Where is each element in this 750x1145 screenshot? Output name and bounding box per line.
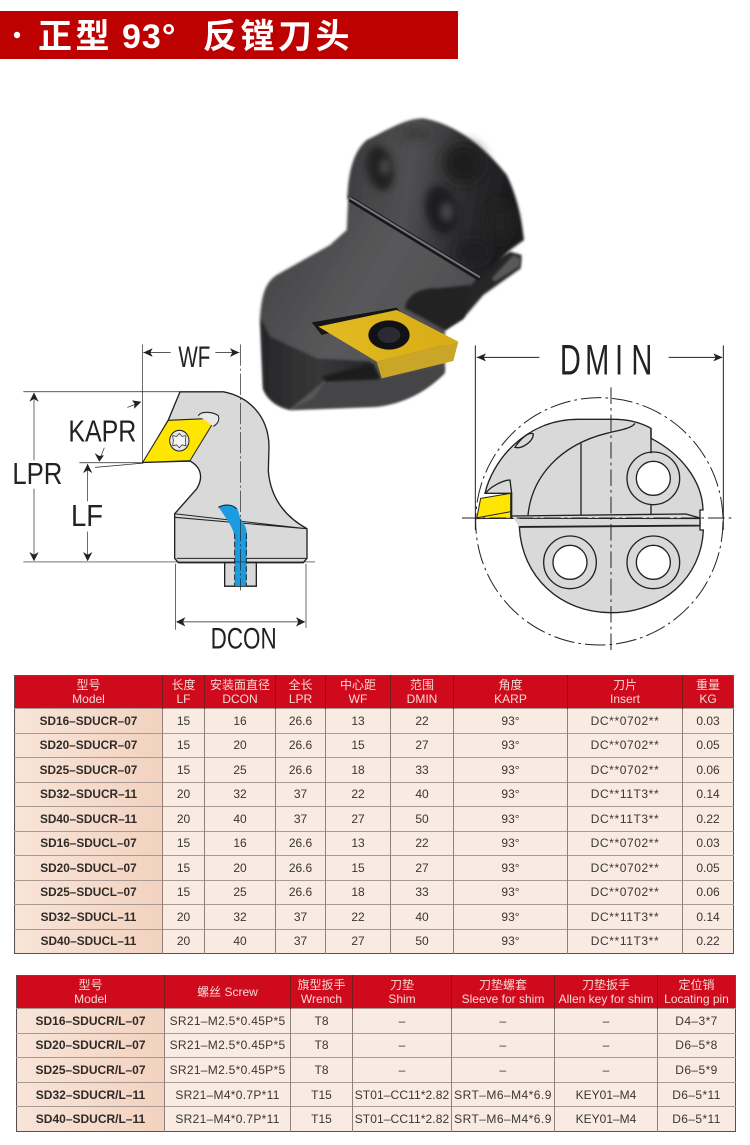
accessories table: T8: [314, 1063, 328, 1077]
parameter table: 0.14: [696, 910, 720, 924]
accessories table: –: [399, 1038, 405, 1052]
title banner: 反镗刀头: [203, 18, 353, 56]
accessories table: D6–5*8: [675, 1038, 718, 1052]
parameter table: 93°: [501, 836, 520, 850]
parameter table: SD25–SDUCR–07: [40, 763, 137, 777]
dimension lines: [23, 344, 315, 630]
parameter table: DC**0702**: [591, 738, 659, 752]
parameter table: 37: [294, 812, 307, 826]
parameter table: 22: [415, 836, 429, 850]
parameter table: 角度: [498, 678, 522, 692]
end view: lower right screw hole: [627, 536, 680, 589]
parameter table: 93°: [501, 861, 520, 875]
end view: dashed DMIN circle: [476, 398, 723, 645]
parameter table: 0.22: [696, 812, 720, 826]
parameter table: 20: [233, 861, 247, 875]
accessories table: –: [499, 1038, 507, 1052]
parameter table: Model: [72, 692, 105, 706]
parameter table: 40: [233, 934, 247, 948]
accessories table: 刀垫: [390, 978, 414, 992]
parameter table: 15: [351, 738, 365, 752]
accessories table: SD20–SDUCR/L–07: [35, 1038, 146, 1052]
parameter table: DC**11T3**: [591, 787, 659, 801]
parameter table: 0.03: [696, 714, 720, 728]
accessories table: SRT–M6–M4*6.9: [454, 1112, 552, 1126]
parameter table: DCON: [222, 692, 258, 706]
parameter table: SD25–SDUCL–07: [40, 885, 137, 899]
accessories table: –: [399, 1014, 405, 1028]
accessories table: KEY01–M4: [576, 1112, 636, 1126]
parameter table: DC**11T3**: [591, 910, 659, 924]
parameter table: SD20–SDUCL–07: [40, 861, 137, 875]
accessories table: T15: [311, 1088, 332, 1102]
parameter table: DMIN: [407, 692, 437, 706]
parameter table: 安装面直径: [210, 678, 270, 692]
parameter table: SD16–SDUCL–07: [40, 836, 137, 850]
parameter table: [14, 675, 734, 954]
parameter table: 0.14: [696, 787, 720, 801]
parameter table: 93°: [501, 763, 520, 777]
right technical drawing: end view: [462, 336, 732, 650]
accessories table: SD32–SDUCR/L–11: [36, 1088, 145, 1102]
side view: spigot: [225, 563, 256, 586]
label: KAPR: KAPR: [68, 414, 136, 449]
accessories table: 螺丝 Screw: [197, 985, 258, 999]
parameter table: 重量: [696, 678, 720, 692]
accessories table: Shim: [388, 992, 416, 1006]
accessories table: KEY01–M4: [576, 1088, 636, 1102]
side view: shoulder lines: [175, 514, 307, 529]
parameter table: 15: [177, 763, 190, 777]
title banner: 正型: [38, 18, 113, 56]
parameter table: DC**0702**: [591, 714, 659, 728]
parameter table: 20: [177, 934, 190, 948]
parameter table: 93°: [501, 910, 520, 924]
label: LPR: LPR: [12, 457, 62, 491]
photo: head shading: [403, 129, 512, 263]
parameter table: DC**0702**: [591, 885, 659, 899]
parameter table: 33: [415, 885, 429, 899]
DMIN dimension: [475, 345, 723, 530]
accessories table: SD16–SDUCR/L–07: [35, 1014, 146, 1028]
accessories table: Allen key for shim: [559, 992, 653, 1006]
parameter table: 93°: [501, 812, 520, 826]
side view: centre line: [240, 344, 242, 590]
parameter table: 0.06: [696, 763, 720, 777]
side view: gray holder body: [143, 392, 307, 563]
accessories table: –: [499, 1014, 507, 1028]
parameter table: KARP: [494, 692, 527, 706]
parameter table: 20: [177, 787, 190, 801]
accessories table: Model: [74, 992, 107, 1006]
parameter table: 全长: [288, 678, 312, 692]
accessories table: D6–5*9: [675, 1063, 718, 1077]
parameter table: 0.05: [696, 738, 720, 752]
title banner: [0, 11, 458, 59]
side view: locating pin: [198, 412, 219, 426]
parameter table: SD32–SDUCR–11: [40, 787, 137, 801]
parameter table: 20: [233, 738, 247, 752]
parameter table: 18: [351, 885, 365, 899]
parameter table: 93°: [501, 738, 520, 752]
parameter table: SD16–SDUCR–07: [40, 714, 137, 728]
accessories table: 型号: [78, 978, 102, 992]
parameter table: DC**0702**: [591, 861, 659, 875]
parameter table: 16: [233, 714, 247, 728]
accessories table: 刀垫扳手: [582, 978, 630, 992]
parameter table: 93°: [501, 714, 520, 728]
parameter table: 15: [177, 836, 190, 850]
parameter table: 0.03: [696, 836, 720, 850]
parameter table: 0.05: [696, 861, 720, 875]
photo: insert screw: [368, 320, 410, 350]
end view: upper relief curves: [528, 423, 651, 515]
parameter table: 37: [294, 910, 307, 924]
parameter table: 型号: [76, 678, 100, 692]
parameter table: 37: [294, 934, 307, 948]
parameter table: 26.6: [289, 714, 312, 728]
parameter table: SD32–SDUCL–11: [41, 910, 136, 924]
parameter table: 40: [415, 787, 429, 801]
parameter table: 15: [177, 714, 190, 728]
photo: pocket shadow: [405, 285, 472, 330]
parameter table: 26.6: [289, 861, 312, 875]
accessories table: SR21–M2.5*0.45P*5: [170, 1063, 285, 1077]
parameter table: DC**11T3**: [591, 934, 659, 948]
accessories table: –: [399, 1063, 405, 1077]
end view: slot band: [512, 514, 700, 527]
parameter table: 0.22: [696, 934, 720, 948]
accessories table: –: [603, 1014, 609, 1028]
accessories table: SR21–M2.5*0.45P*5: [170, 1038, 285, 1052]
parameter table: 中心距: [340, 678, 376, 692]
parameter table: 27: [351, 934, 365, 948]
photo: main body: [260, 195, 483, 410]
parameter table: 25: [233, 885, 247, 899]
parameter table: 26.6: [289, 885, 312, 899]
parameter table: 93°: [501, 885, 520, 899]
parameter table: DC**0702**: [591, 763, 659, 777]
parameter table: 93°: [501, 934, 520, 948]
parameter table: 27: [415, 861, 429, 875]
product photo: boring head: [260, 118, 524, 410]
photo: yellow insert top: [318, 310, 458, 362]
parameter table: 32: [233, 787, 247, 801]
accessories table: Locating pin: [664, 992, 729, 1006]
photo: slot line: [350, 199, 480, 278]
accessories table: T8: [314, 1038, 328, 1052]
parameter table: 40: [233, 812, 247, 826]
parameter table: LF: [176, 692, 190, 706]
parameter table: 26.6: [289, 738, 312, 752]
photo: rear jaw: [410, 252, 522, 330]
parameter table: 长度: [171, 678, 196, 692]
parameter table: 22: [415, 714, 429, 728]
title banner: 93°: [122, 18, 176, 56]
parameter table: 15: [177, 738, 190, 752]
parameter table: SD20–SDUCR–07: [40, 738, 137, 752]
accessories table: SD25–SDUCR/L–07: [35, 1063, 146, 1077]
end view: yellow insert: [477, 493, 511, 519]
end view: upper right screw hole: [627, 452, 680, 505]
parameter table: 50: [415, 812, 429, 826]
parameter table: 刀片: [613, 678, 637, 692]
parameter table: WF: [349, 692, 367, 706]
parameter table: 20: [177, 910, 190, 924]
parameter table: SD40–SDUCR–11: [40, 812, 137, 826]
accessories table: 定位销: [678, 978, 714, 992]
parameter table: 27: [415, 738, 429, 752]
parameter table: KG: [699, 692, 717, 706]
label: LF: LF: [71, 499, 103, 533]
accessories table: 刀垫螺套: [479, 978, 527, 992]
parameter table: 93°: [501, 787, 520, 801]
photo: right screw recess: [421, 183, 462, 237]
side view: torx screw: [170, 430, 189, 451]
arrowheads: [29, 348, 305, 626]
photo: cylindrical head: [347, 118, 524, 280]
label: DMIN: DMIN: [560, 336, 652, 384]
parameter table: 18: [351, 763, 365, 777]
label: WF: WF: [178, 341, 210, 374]
photo: lower jaw band: [290, 365, 444, 409]
accessories table: D6–5*11: [672, 1112, 721, 1126]
drawing canvas: [0, 11, 732, 656]
accessories table: D4–3*7: [675, 1014, 718, 1028]
parameter table: DC**0702**: [591, 836, 659, 850]
parameter table: SD40–SDUCL–11: [41, 934, 136, 948]
parameter table: 25: [233, 763, 247, 777]
accessories table: Wrench: [301, 992, 342, 1006]
parameter table: 37: [294, 787, 307, 801]
parameter table: LPR: [289, 692, 312, 706]
parameter table: 15: [351, 861, 365, 875]
parameter table: 16: [233, 836, 247, 850]
side view: blue coolant channel: [218, 505, 247, 586]
accessories table: –: [499, 1063, 507, 1077]
parameter table: Insert: [610, 692, 640, 706]
parameter table: 13: [351, 836, 365, 850]
end view: centre lines: [462, 387, 732, 650]
parameter table: 26.6: [289, 763, 312, 777]
parameter table: 13: [351, 714, 365, 728]
accessories table: D6–5*11: [672, 1088, 721, 1102]
parameter table: 范围: [410, 678, 434, 692]
parameter table: 40: [415, 910, 429, 924]
left technical drawing: side view: [12, 341, 315, 656]
parameter table: 22: [351, 787, 365, 801]
parameter table: 50: [415, 934, 429, 948]
accessories table: SD40–SDUCR/L–11: [36, 1112, 145, 1126]
parameter table: 15: [177, 861, 190, 875]
parameter table: 15: [177, 885, 190, 899]
accessories table: SR21–M2.5*0.45P*5: [170, 1014, 285, 1028]
accessories table: SR21–M4*0.7P*11: [175, 1088, 280, 1102]
side view: yellow insert: [143, 418, 216, 462]
accessories table: –: [603, 1063, 609, 1077]
accessories table: Sleeve for shim: [462, 992, 544, 1006]
accessories table: T15: [311, 1112, 332, 1126]
accessories table: –: [603, 1038, 609, 1052]
parameter table: 20: [177, 812, 190, 826]
parameter table: 22: [351, 910, 365, 924]
photo: yellow insert side: [377, 342, 458, 378]
photo: left screw recess: [362, 143, 398, 193]
parameter table: DC**11T3**: [591, 812, 659, 826]
parameter table: 32: [233, 910, 247, 924]
accessories table: SRT–M6–M4*6.9: [454, 1088, 552, 1102]
parameter table: 26.6: [289, 836, 312, 850]
label: DCON: DCON: [211, 623, 277, 656]
end view: lower left screw hole: [544, 536, 596, 589]
end view: gray body: [485, 419, 703, 613]
accessories table: SR21–M4*0.7P*11: [175, 1112, 280, 1126]
photo: lower side face: [261, 318, 380, 409]
accessories table: [16, 975, 736, 1132]
parameter table: 0.06: [696, 885, 720, 899]
parameter table: 27: [351, 812, 365, 826]
accessories table: ST01–CC11*2.82: [355, 1112, 449, 1126]
accessories table: T8: [314, 1014, 328, 1028]
accessories table: ST01–CC11*2.82: [355, 1088, 449, 1102]
parameter table: 33: [415, 763, 429, 777]
accessories table: 旗型扳手: [297, 978, 346, 992]
